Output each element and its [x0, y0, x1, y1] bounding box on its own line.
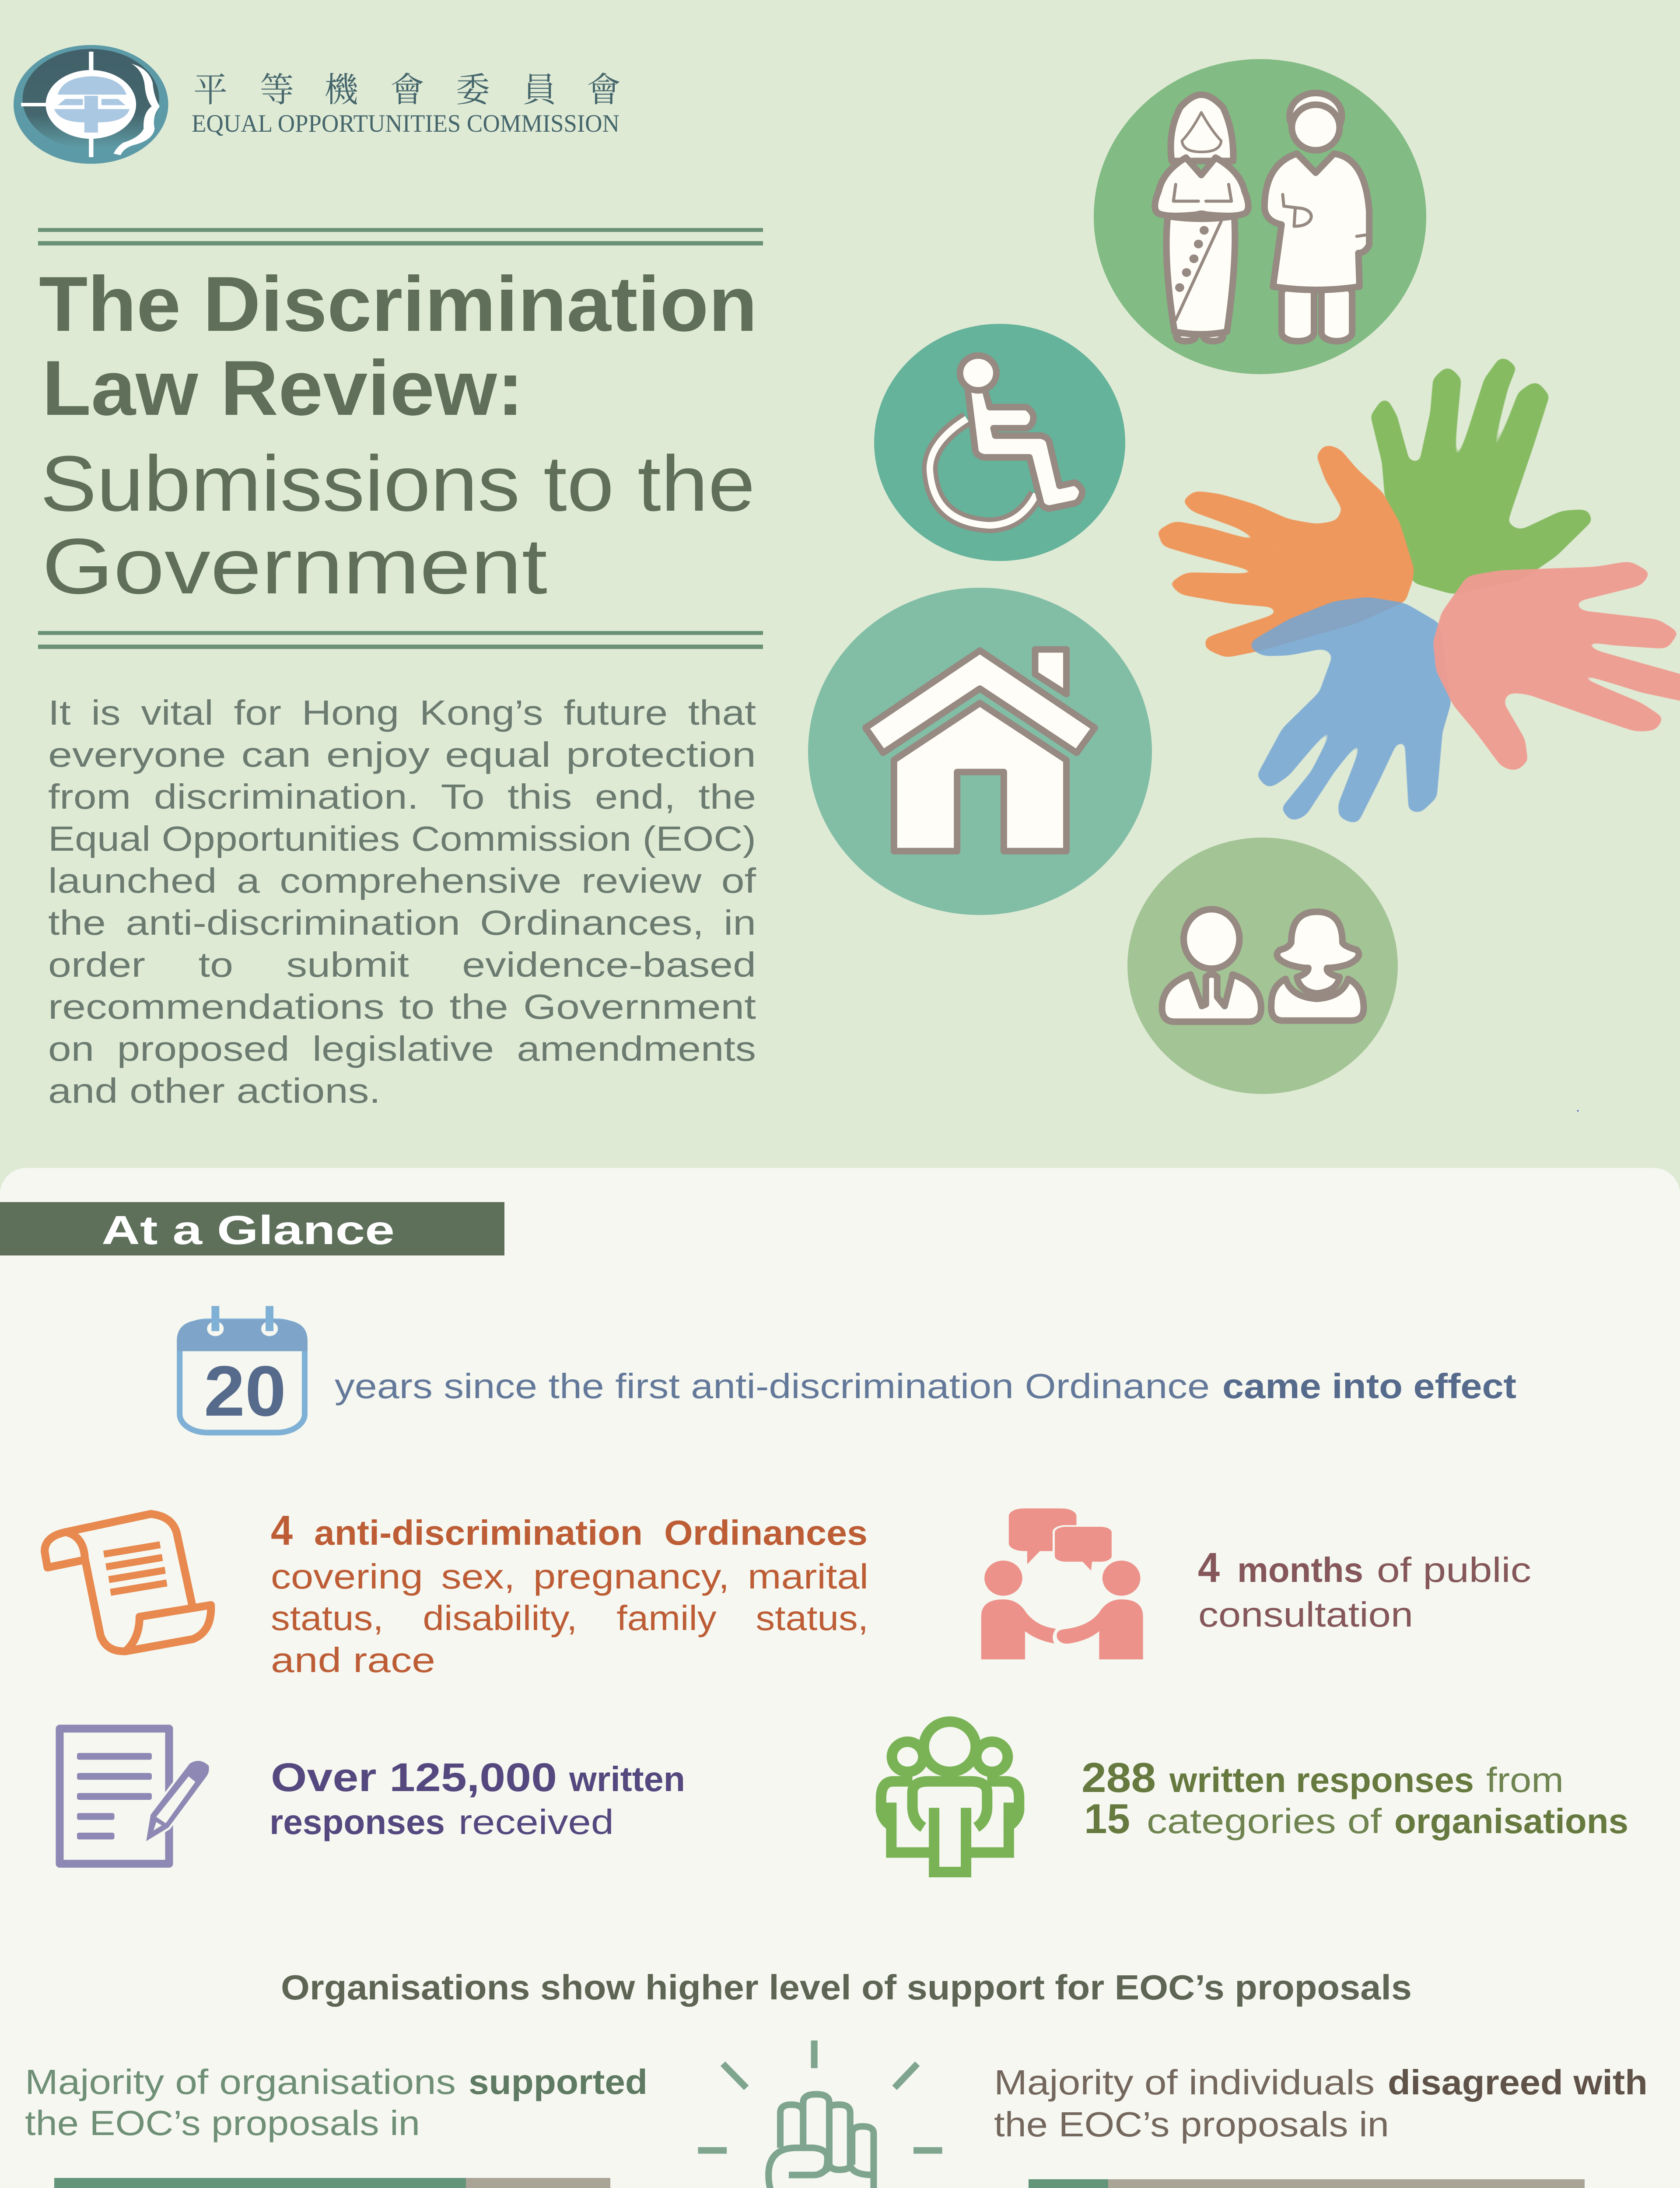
text: organisations supported: the EOC’s proposals in: [25, 2104, 420, 2142]
title: The Discrimination: [39, 260, 757, 347]
text: 4 ordinances: Ordinances: [664, 1513, 868, 1552]
icon: calendar 20: 20: [204, 1351, 286, 1431]
icon: raised fist: [698, 2041, 942, 2188]
text: 20 years: years since the first anti-discrimination Ordinance: [335, 1367, 1210, 1406]
bar: 66 out of 77: [1029, 2179, 1585, 2188]
intro paragraph: the anti-discrimination Ordinances, in: [48, 903, 756, 942]
text: 288 written responses: categories of: [1147, 1802, 1382, 1841]
title: Government: [42, 522, 547, 610]
icon: document and pencil: [60, 1729, 209, 1864]
text: 4 months: of public: [1377, 1550, 1531, 1589]
text: organisations supported: [25, 2062, 648, 2142]
text: 288 written responses: from: [1486, 1760, 1564, 1799]
text: over 125,000: Over 125,000: [271, 1755, 557, 1800]
intro paragraph: on proposed legislative amendments: [48, 1029, 756, 1068]
intro paragraph: launched a comprehensive review of: [48, 861, 756, 900]
icon: handshake and speech bubbles: [981, 1508, 1143, 1659]
icon: calendar 20: [177, 1306, 308, 1433]
text: over 125,000: responses: [270, 1802, 445, 1841]
illustration: four coloured hands: [1158, 355, 1680, 825]
text: 288 written responses: written responses: [1169, 1760, 1474, 1799]
logo text: English name: EQUAL OPPORTUNITIES COMMISSION: [192, 110, 620, 137]
icon: group of people: [881, 1722, 1019, 1872]
intro paragraph: and other actions.: [48, 1071, 381, 1110]
intro paragraph: from discrimination. To this end, the: [48, 777, 756, 816]
title: Law Review:: [42, 344, 524, 431]
intro paragraph: order to submit evidence-based: [48, 945, 756, 984]
subheading: level of support: Organisations show higher level of support for EOC’s proposals: [281, 1968, 1412, 2007]
circle icon: man and woman: [1127, 838, 1398, 1094]
title: Submissions to the: [40, 440, 755, 528]
text: over 125,000: written: [569, 1760, 685, 1799]
text: organisations supported: supported: [469, 2062, 648, 2101]
text: 4 ordinances: status, disability, family status,: [271, 1599, 868, 1637]
text: individuals disagreed: disagreed with: [1388, 2063, 1648, 2102]
text: 4 months: consultation: [1198, 1595, 1413, 1634]
intro paragraph: [48, 693, 756, 1110]
intro paragraph: It is vital for Hong Kong’s future that: [48, 693, 756, 732]
text: organisations supported: Majority of organisations: [25, 2062, 456, 2101]
text: 288 written responses: organisations: [1394, 1802, 1628, 1841]
intro paragraph: Equal Opportunities Commission (EOC): [48, 819, 756, 858]
text: over 125,000: [270, 1755, 685, 1841]
text: 4 months: months: [1237, 1550, 1363, 1589]
circle icon: wheelchair: [874, 324, 1125, 561]
text: 288 written responses: [1082, 1754, 1628, 1842]
text: 288 written responses: 288: [1082, 1754, 1156, 1801]
text: 4 ordinances: covering sex, pregnancy, marital: [271, 1557, 868, 1596]
text: 4 ordinances: anti-discrimination: [314, 1513, 643, 1552]
circle icon: couple in traditional dress: [1094, 59, 1426, 374]
text: over 125,000: received: [458, 1802, 614, 1841]
logo text: Chinese name: 平等機會委員會: [193, 71, 621, 109]
text: 4 ordinances: [271, 1507, 868, 1680]
heading: at a glance: At a Glance: [102, 1207, 395, 1253]
text: 4 ordinances: 4: [271, 1507, 293, 1554]
heading: at a glance: [0, 1202, 504, 1255]
circle icon: house: [808, 588, 1152, 915]
title: [39, 260, 757, 610]
text: individuals disagreed: [994, 2063, 1648, 2144]
icon: scroll: [45, 1514, 211, 1652]
text: 4 months: [1198, 1544, 1531, 1634]
intro paragraph: everyone can enjoy equal protection: [48, 735, 756, 774]
panel: at a glance: [0, 1168, 1680, 2188]
intro paragraph: recommendations to the Government: [48, 987, 756, 1026]
text: 4 months: 4: [1198, 1544, 1220, 1591]
text: individuals disagreed: Majority of individuals: [994, 2063, 1375, 2102]
text: 4 ordinances: and race: [271, 1641, 435, 1680]
text: 20 years: came into effect: [1222, 1367, 1516, 1406]
bar: 57 out of 77: [54, 2178, 610, 2188]
logo: EOC emblem: [14, 45, 168, 164]
text: individuals disagreed: the EOC’s proposals in: [994, 2105, 1389, 2144]
text: 20 years: [335, 1367, 1516, 1406]
text: 288 written responses: 15: [1084, 1795, 1130, 1842]
